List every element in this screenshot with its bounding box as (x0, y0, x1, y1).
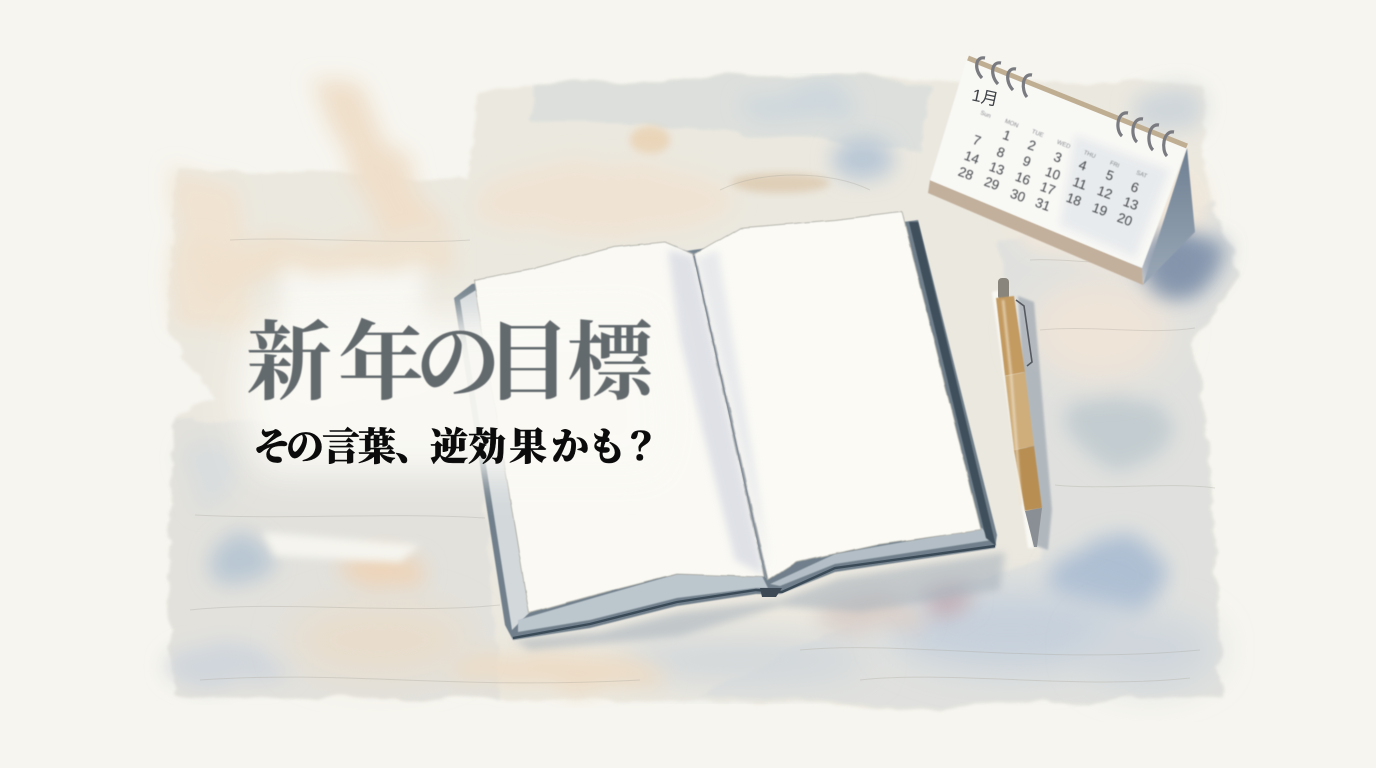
pen top knob (998, 278, 1009, 300)
calendar weekdays and dates: 3 (1052, 149, 1064, 166)
calendar weekdays and dates: 11 (1071, 174, 1089, 193)
calendar weekdays and dates: 14 (962, 148, 982, 167)
calendar stand (1143, 148, 1195, 285)
icon: desk calendar (928, 58, 1206, 292)
subtitle: その言葉、逆効果かも？ (253, 427, 660, 469)
calendar weekdays and dates: 10 (1043, 164, 1062, 183)
pen middle barrel (1005, 372, 1034, 450)
calendar weekdays and dates: 16 (1013, 169, 1032, 188)
calendar weekdays and dates: 30 (1008, 186, 1027, 205)
calendar weekdays and dates: THU (1083, 150, 1096, 160)
calendar weekdays and dates: 28 (956, 164, 975, 183)
title backing glow (235, 310, 670, 475)
notebook cover (454, 220, 997, 640)
right page (695, 212, 981, 580)
cover right edge (909, 222, 996, 546)
binding rings right (1118, 113, 1174, 156)
calendar weekdays and dates: TUE (1031, 129, 1044, 139)
calendar weekdays and dates: 12 (1095, 183, 1114, 202)
calendar weekdays and dates: 13 (1121, 194, 1140, 213)
calendar weekdays and dates: 1 (1001, 127, 1013, 144)
watercolor wood-table wash (168, 72, 1240, 706)
calendar weekdays and dates: 13 (987, 159, 1006, 178)
left page (474, 242, 764, 613)
pen tip (1025, 508, 1042, 547)
calendar weekdays and dates: 19 (1090, 200, 1109, 219)
pen halo (992, 290, 1034, 548)
notebook page edges (460, 290, 530, 630)
calendar weekdays and dates (956, 110, 1148, 229)
notebook shadow (513, 552, 1005, 650)
calendar sheet (930, 58, 1187, 268)
calendar weekdays and dates: SAT (1135, 170, 1148, 180)
calendar weekdays and dates: 17 (1038, 179, 1057, 198)
calendar weekdays and dates: 20 (1115, 210, 1134, 229)
cover bottom edge (513, 546, 995, 638)
binding rings left (977, 58, 1032, 97)
icon: open notebook (454, 212, 1005, 650)
calendar weekdays and dates: Sun (979, 110, 991, 120)
calendar weekdays and dates: 4 (1077, 157, 1089, 174)
calendar month: 1月 (970, 86, 1000, 110)
calendar weekdays and dates: FRI (1109, 160, 1120, 170)
icon: pen (992, 278, 1052, 550)
calendar binding (968, 58, 1187, 146)
pen lower barrel (1014, 446, 1042, 511)
calendar weekdays and dates: 31 (1033, 195, 1052, 214)
wood grain lines (190, 175, 1215, 683)
pen upper barrel (996, 296, 1025, 376)
calendar weekdays and dates: 29 (982, 174, 1001, 193)
pen shadow (1018, 296, 1052, 550)
calendar weekdays and dates: MON (1004, 119, 1019, 129)
calendar weekdays and dates: 18 (1064, 190, 1083, 209)
calendar weekdays and dates: 8 (995, 144, 1007, 161)
calendar weekdays and dates: 6 (1129, 179, 1141, 196)
calendar weekdays and dates: 2 (1026, 137, 1038, 154)
pen clip (1016, 300, 1032, 366)
calendar base (928, 180, 1143, 285)
calendar weekdays and dates: WED (1056, 140, 1072, 151)
gutter line (694, 256, 766, 578)
calendar weekdays and dates: 9 (1021, 153, 1033, 170)
calendar weekdays and dates: 5 (1104, 167, 1116, 184)
calendar weekdays and dates: 7 (971, 132, 983, 149)
page gutter shading (668, 250, 764, 575)
title: 新年の目標 (246, 315, 658, 411)
calendar shadow (1138, 232, 1206, 292)
